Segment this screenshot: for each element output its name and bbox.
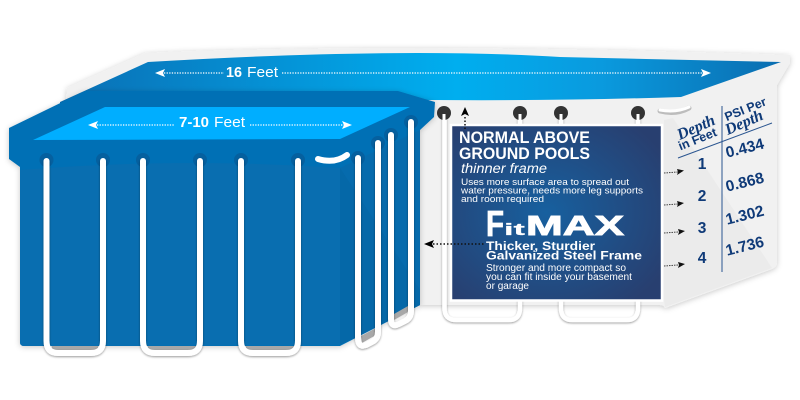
psi values: 1.302	[724, 203, 766, 229]
subheading: thinner frame: thinner frame	[461, 161, 547, 176]
column heading: depth in feet: in Feet	[676, 125, 720, 153]
text: normal pool description: water pressure, needs more leg supports	[460, 186, 643, 196]
logo: FitMAX: MAX	[526, 210, 624, 241]
logo: FitMAX: F	[486, 203, 504, 244]
dimension: 16 feet: Feet	[247, 64, 279, 81]
text: fitmax description	[486, 263, 632, 292]
side shading	[664, 118, 772, 307]
column heading: psi per depth	[722, 95, 769, 139]
table rules	[678, 106, 772, 272]
table: depth vs psi	[674, 95, 772, 272]
arrow: to thicker frame	[424, 240, 484, 248]
text: fitmax description: you can fit inside your basement	[486, 272, 632, 283]
leg holes	[40, 115, 418, 167]
text: normal pool description	[460, 177, 643, 205]
legs of large pool	[444, 115, 638, 320]
depth values: 2	[698, 188, 706, 205]
text: fitmax description: or garage	[486, 281, 529, 292]
handle	[318, 155, 347, 161]
side legs	[358, 122, 411, 346]
leg holes	[437, 106, 645, 120]
dimension: 16 feet: 16	[226, 64, 242, 81]
depth values: 1	[698, 156, 707, 173]
depth values: 4	[698, 250, 707, 267]
handle	[660, 107, 689, 112]
arrows: depth markers	[664, 169, 685, 268]
text: normal pool description: Uses more surface area to spread out	[461, 177, 629, 188]
pool body	[66, 48, 790, 308]
psi values: 1.736	[724, 234, 766, 260]
panel: info box	[451, 125, 662, 300]
text: fitmax description: Stronger and more compact so	[486, 263, 626, 274]
heading: normal above ground pools	[459, 128, 590, 163]
logo: FitMAX	[486, 203, 624, 244]
heading: normal above ground pools: NORMAL ABOVE	[459, 128, 590, 147]
logo: FitMAX: it	[504, 220, 526, 239]
column heading: depth in feet: Depth	[674, 112, 718, 144]
side face	[340, 130, 420, 345]
text: normal pool description: and room required	[461, 194, 544, 205]
heading: normal above ground pools: GROUND POOLS	[459, 144, 590, 163]
dimension: 7-10 feet: Feet	[214, 114, 246, 131]
dimension: 16 feet	[155, 64, 711, 81]
heading: thicker, sturdier: Galvanized Steel Frame	[486, 248, 642, 262]
front legs	[46, 161, 298, 353]
column heading: psi per depth: PSI Per	[723, 95, 769, 124]
depth values: 3	[698, 220, 707, 237]
dimension: 7-10 feet	[88, 114, 352, 131]
water surface with 16 feet	[60, 53, 781, 110]
front face	[20, 163, 340, 346]
dimension: 7-10 feet: 7-10	[179, 114, 209, 131]
panel: large normal above ground pool	[60, 48, 790, 320]
ground shadows under legs	[52, 306, 408, 350]
depth values	[698, 156, 707, 267]
arrow: up to thin frame	[461, 107, 469, 129]
heading: thicker, sturdier	[486, 239, 642, 262]
column heading: psi per depth: Depth	[722, 107, 766, 139]
water surface with 7-10 feet	[33, 107, 410, 140]
heading: thicker, sturdier: Thicker, Sturdier	[486, 239, 595, 253]
psi values	[724, 136, 766, 260]
psi values: 0.434	[724, 136, 766, 162]
pool body with rim	[9, 91, 435, 346]
psi values: 0.868	[724, 170, 766, 196]
panel: fitmax small pool	[9, 91, 435, 353]
